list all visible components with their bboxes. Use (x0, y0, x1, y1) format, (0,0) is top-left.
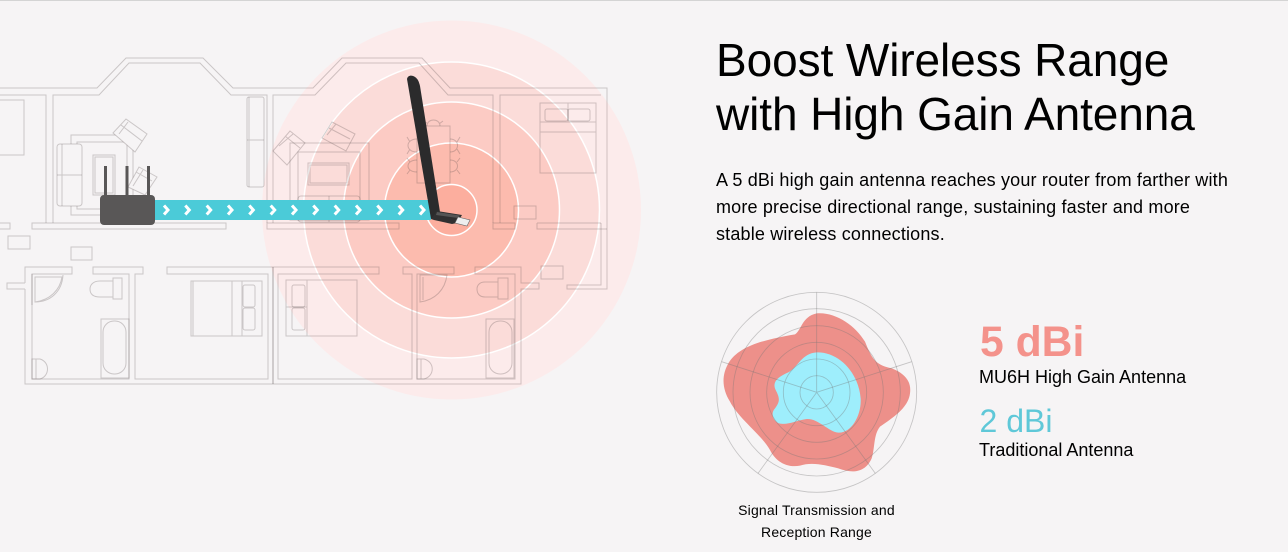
icon: USB adapter with antenna (407, 76, 470, 226)
top border line (0, 0, 1288, 1)
signal range circles (262, 20, 641, 400)
icon: router (100, 166, 155, 225)
floor plan illustration (0, 20, 641, 400)
radar caption (738, 502, 895, 540)
radar grid (717, 292, 917, 492)
signal beam with chevrons (155, 200, 431, 220)
description: A 5 dBi high gain antenna reaches your router from farther with (716, 170, 1228, 190)
beds (0, 100, 596, 336)
living room furniture (57, 97, 369, 222)
heading: Boost Wireless Range (716, 34, 1169, 86)
heading: with High Gain Antenna (716, 88, 1195, 140)
dining table and chairs (407, 120, 460, 183)
description: stable wireless connections. (716, 224, 945, 244)
heading (716, 34, 1195, 140)
description (716, 170, 1228, 244)
legend: 5 dBi value: 5 dBi (980, 318, 1084, 366)
legend: MU6H label: MU6H High Gain Antenna (979, 367, 1186, 387)
bathroom fixtures (32, 274, 514, 379)
legend: 2 dBi value: 2 dBi (980, 403, 1052, 439)
radar caption: Reception Range (761, 524, 872, 540)
radar caption: Signal Transmission and (738, 502, 895, 518)
red 5 dBi area (724, 313, 910, 471)
legend: traditional label: Traditional Antenna (979, 440, 1133, 460)
walls and furniture (0, 58, 607, 384)
description: more precise directional range, sustaining faster and more (716, 197, 1190, 217)
cyan 2 dBi area (773, 352, 861, 433)
